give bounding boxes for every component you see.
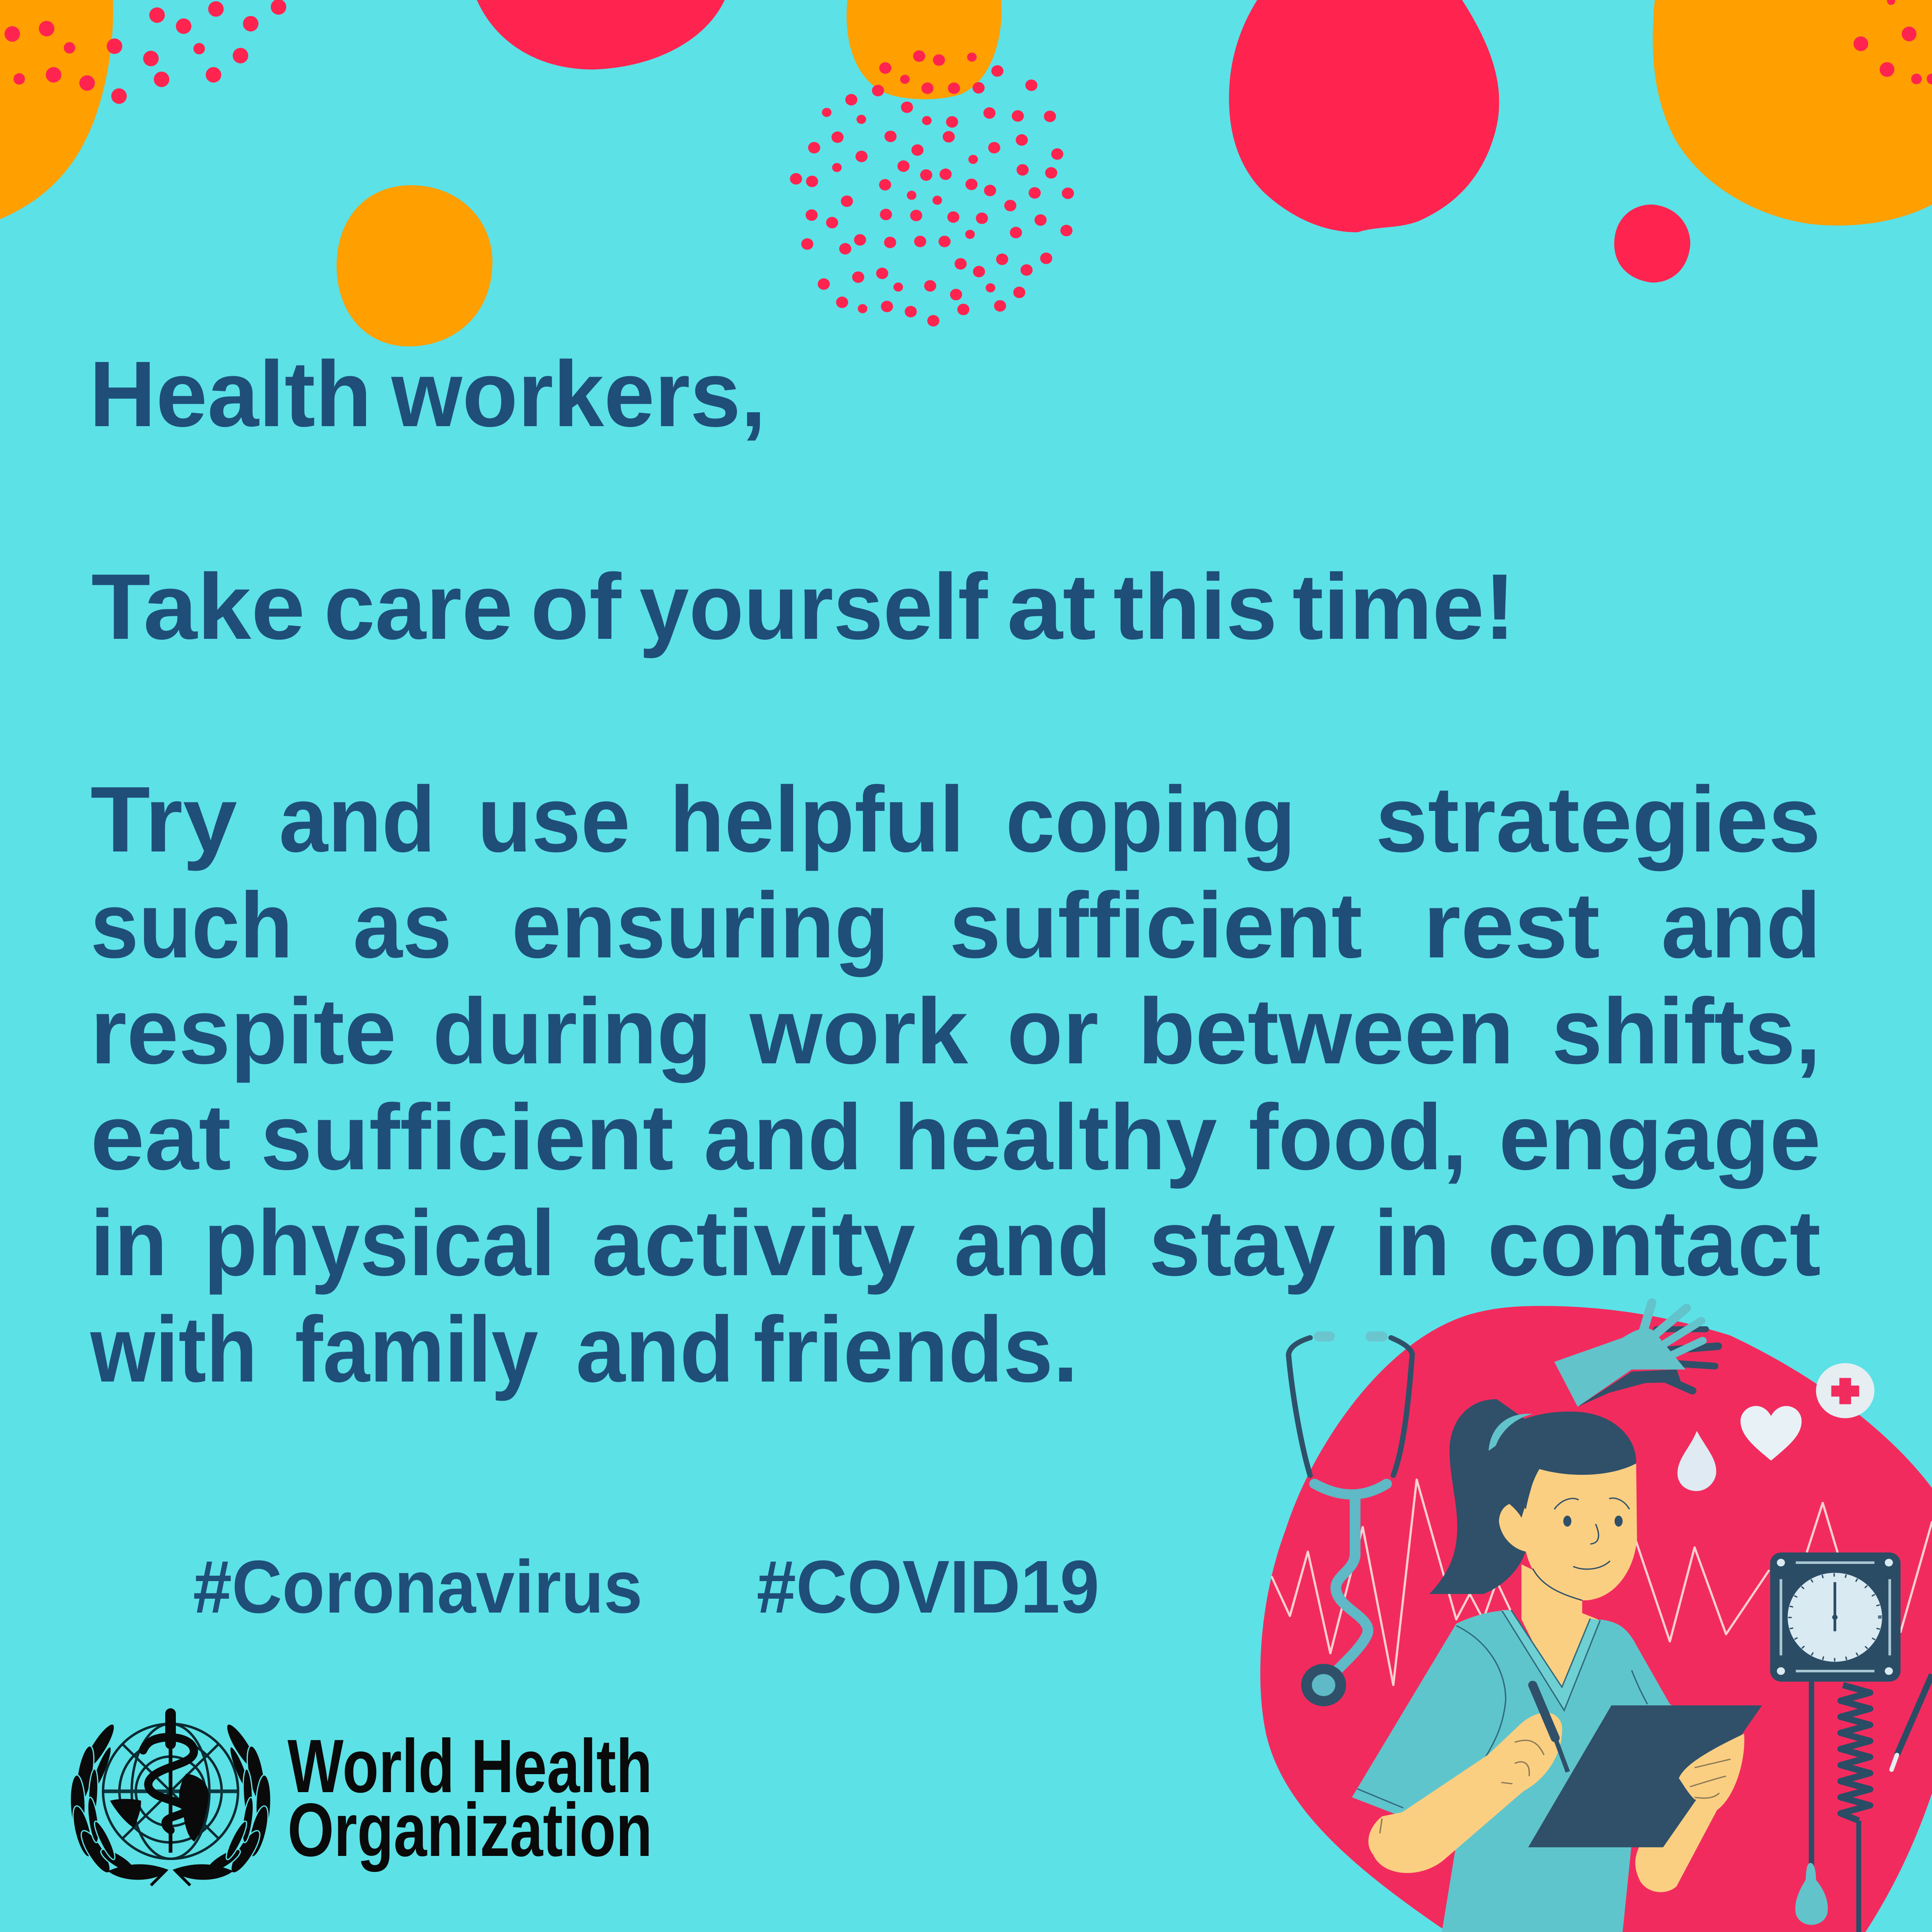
body text: coping strategies: shifts, bbox=[1552, 979, 1821, 1083]
logo text: World Health bbox=[288, 1724, 652, 1808]
body text: coping strategies: contact bbox=[1487, 1191, 1821, 1295]
icon: stethoscope bbox=[1289, 1337, 1412, 1701]
body text: coping strategies: stay bbox=[1149, 1191, 1335, 1295]
body text: coping strategies: and bbox=[954, 1191, 1111, 1295]
hashtags bbox=[193, 1545, 1099, 1629]
hashtags: #COVID19 bbox=[757, 1545, 1099, 1629]
body text: coping strategies: in bbox=[90, 1191, 167, 1295]
body text: coping strategies: activity bbox=[592, 1191, 915, 1295]
body text: coping strategies: strategies bbox=[1375, 768, 1821, 872]
body text: coping strategies: sufficient bbox=[261, 1085, 674, 1189]
icon: glove bbox=[1554, 1303, 1718, 1407]
body text: coping strategies: family bbox=[295, 1298, 538, 1402]
body text: coping strategies: such bbox=[90, 874, 293, 977]
heading: take care: of bbox=[530, 555, 622, 659]
heading: take care: this bbox=[1113, 555, 1277, 659]
heartbeat line bbox=[1272, 1480, 1932, 1685]
pen bbox=[1533, 1685, 1568, 1772]
icon: water drop bbox=[1678, 1431, 1716, 1491]
logo text: Organization bbox=[288, 1788, 652, 1872]
body text: coping strategies: coping bbox=[1006, 768, 1296, 872]
heading: take care: care bbox=[324, 555, 513, 659]
decorative blobs bbox=[0, 0, 1932, 346]
body text: coping strategies bbox=[90, 768, 1821, 1402]
heading: health workers: workers, bbox=[391, 342, 766, 446]
body text: coping strategies: helpful bbox=[669, 768, 964, 872]
heading: take care: at bbox=[1007, 555, 1096, 659]
WHO logo bbox=[69, 1708, 652, 1885]
heading: take care: yourself bbox=[639, 555, 988, 659]
body text: coping strategies: work bbox=[749, 979, 968, 1083]
heading: take care: Take bbox=[91, 555, 305, 659]
body text: coping strategies: eat bbox=[90, 1085, 231, 1189]
body text: coping strategies: in bbox=[1374, 1191, 1450, 1295]
clipboard bbox=[1528, 1705, 1762, 1847]
heading: take care bbox=[91, 555, 1515, 659]
body text: coping strategies: with bbox=[90, 1298, 257, 1402]
heading: take care: time! bbox=[1292, 555, 1515, 659]
dot cluster: centre circle bbox=[790, 50, 1074, 326]
body text: coping strategies: and bbox=[279, 768, 436, 872]
body text: coping strategies: and bbox=[576, 1298, 734, 1402]
body text: coping strategies: during bbox=[433, 979, 712, 1083]
icon: blood pressure monitor bbox=[1770, 1552, 1932, 1932]
body text: coping strategies: between bbox=[1138, 979, 1514, 1083]
body text: coping strategies: sufficient bbox=[949, 874, 1362, 977]
nurse figure bbox=[1352, 1399, 1762, 1932]
body text: coping strategies: and bbox=[704, 1085, 862, 1189]
body text: coping strategies: food, bbox=[1249, 1085, 1467, 1189]
red circle backdrop bbox=[1260, 1306, 1932, 1932]
body text: coping strategies: healthy bbox=[894, 1085, 1217, 1189]
body text: coping strategies: physical bbox=[204, 1191, 555, 1295]
body text: coping strategies: and bbox=[1661, 874, 1821, 977]
heading: health workers bbox=[89, 342, 766, 446]
hashtags: #Coronavirus bbox=[193, 1545, 643, 1629]
body text: coping strategies: friends. bbox=[753, 1298, 1078, 1402]
body text: coping strategies: Try bbox=[90, 768, 237, 872]
body text: coping strategies: or bbox=[1007, 979, 1099, 1083]
dot cluster: top left bbox=[4, 0, 286, 104]
icon: heart bbox=[1741, 1406, 1802, 1460]
body text: coping strategies: ensuring bbox=[512, 874, 889, 977]
dot cluster: top right bbox=[1853, 0, 1932, 84]
body text: coping strategies: respite bbox=[90, 979, 396, 1083]
body text: coping strategies: as bbox=[353, 874, 452, 977]
body text: coping strategies: rest bbox=[1423, 874, 1600, 977]
icon: WHO emblem bbox=[69, 1708, 272, 1885]
body text: coping strategies: engage bbox=[1499, 1085, 1821, 1189]
illustration: nurse bbox=[1260, 1303, 1932, 1932]
heading: health workers: Health bbox=[89, 342, 372, 446]
logo text bbox=[288, 1724, 652, 1872]
icon: medical cross badge bbox=[1816, 1363, 1874, 1418]
body text: coping strategies: use bbox=[477, 768, 630, 872]
